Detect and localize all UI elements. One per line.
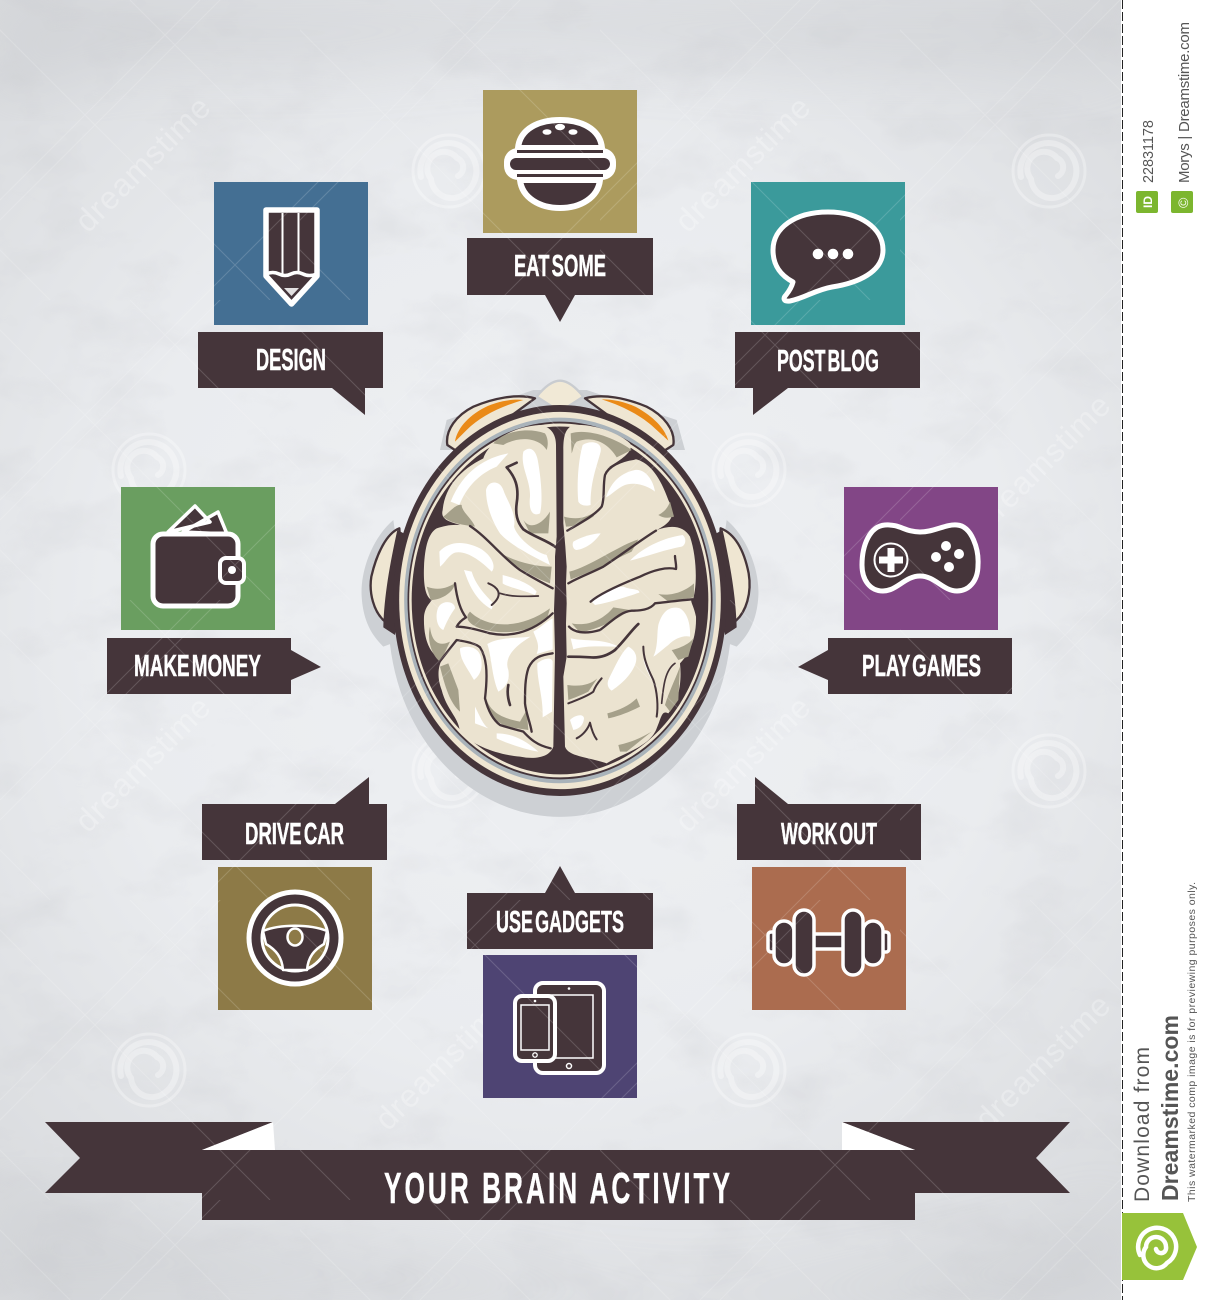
title ribbon	[45, 1122, 1070, 1220]
panel: use gadgets	[467, 866, 653, 1098]
panel: play games	[798, 487, 1012, 694]
watermark spirals and text: dreamstime	[967, 387, 1117, 537]
label: work out: WORK OUT	[781, 816, 877, 851]
watermark spirals and text: dreamstime	[667, 689, 817, 839]
watermark spirals and text: dreamstime	[67, 89, 217, 239]
label: work out	[737, 777, 921, 860]
head drop shadow	[362, 390, 758, 817]
label: design: DESIGN	[256, 342, 326, 377]
label: post blog: POST BLOG	[777, 343, 879, 378]
tile	[121, 487, 275, 630]
dreamstime tag	[1122, 1213, 1197, 1280]
tile	[483, 955, 637, 1098]
label: play games: PLAY GAMES	[862, 648, 981, 683]
label: make money	[107, 638, 321, 694]
watermark spirals and text	[67, 89, 1117, 1137]
id badge: ID	[1141, 196, 1155, 208]
watermark spirals and text: dreamstime	[367, 987, 517, 1137]
nose	[537, 381, 583, 412]
disclaimer: This watermarked comp image is for previewing purposes only.	[1186, 882, 1198, 1202]
label: eat some	[467, 238, 653, 322]
panel: work out	[737, 777, 921, 1010]
label: use gadgets: USE GADGETS	[496, 904, 624, 939]
left hemisphere	[424, 425, 557, 758]
tile	[844, 487, 998, 630]
watermark spirals and text: dreamstime	[667, 89, 817, 239]
watermark spirals and text: dreamstime	[67, 689, 217, 839]
tile	[483, 90, 637, 233]
icon: dumbbell	[768, 910, 889, 975]
sidebar	[1121, 0, 1210, 1300]
icon: tablet and phone	[515, 983, 604, 1073]
ears	[371, 528, 750, 621]
image id: 22831178	[1141, 120, 1157, 183]
right hemisphere	[563, 425, 696, 763]
panel: drive car	[202, 777, 387, 1010]
tile	[214, 182, 368, 325]
ear bands	[383, 530, 737, 635]
brain illustration	[362, 381, 758, 817]
panel: post blog	[735, 182, 920, 415]
label: drive car: DRIVE CAR	[245, 816, 344, 851]
copyright badge: ©	[1175, 197, 1191, 208]
icon: steering wheel	[249, 892, 341, 984]
label: post blog	[735, 332, 920, 415]
copyright badge	[1171, 191, 1193, 213]
id badge	[1136, 191, 1158, 213]
panel: design	[198, 182, 383, 415]
label: use gadgets	[467, 866, 653, 949]
dreamstime brand: Dreamstime.com	[1157, 1015, 1183, 1201]
title text: YOUR BRAIN ACTIVITY	[384, 1164, 733, 1213]
credit: Morys | Dreamstime.com	[1176, 22, 1193, 183]
tile	[752, 867, 906, 1010]
icon: wallet	[153, 506, 244, 606]
skull rings	[393, 405, 727, 796]
icon: game controller	[862, 525, 978, 591]
icon: burger	[504, 120, 616, 208]
label: make money: MAKE MONEY	[134, 648, 261, 683]
icon: speech bubble	[773, 212, 883, 301]
label: eat some: EAT SOME	[514, 248, 606, 283]
tile	[751, 182, 905, 325]
icon: pencil	[266, 210, 317, 304]
watermark spirals and text: dreamstime	[967, 987, 1117, 1137]
brows	[447, 396, 674, 453]
panel: eat some	[467, 90, 653, 322]
panel: make money	[107, 487, 321, 694]
label: drive car	[202, 777, 387, 860]
label: design	[198, 332, 383, 415]
label: play games	[798, 638, 1012, 694]
download text: Download from	[1131, 1047, 1154, 1202]
tile	[218, 867, 372, 1010]
